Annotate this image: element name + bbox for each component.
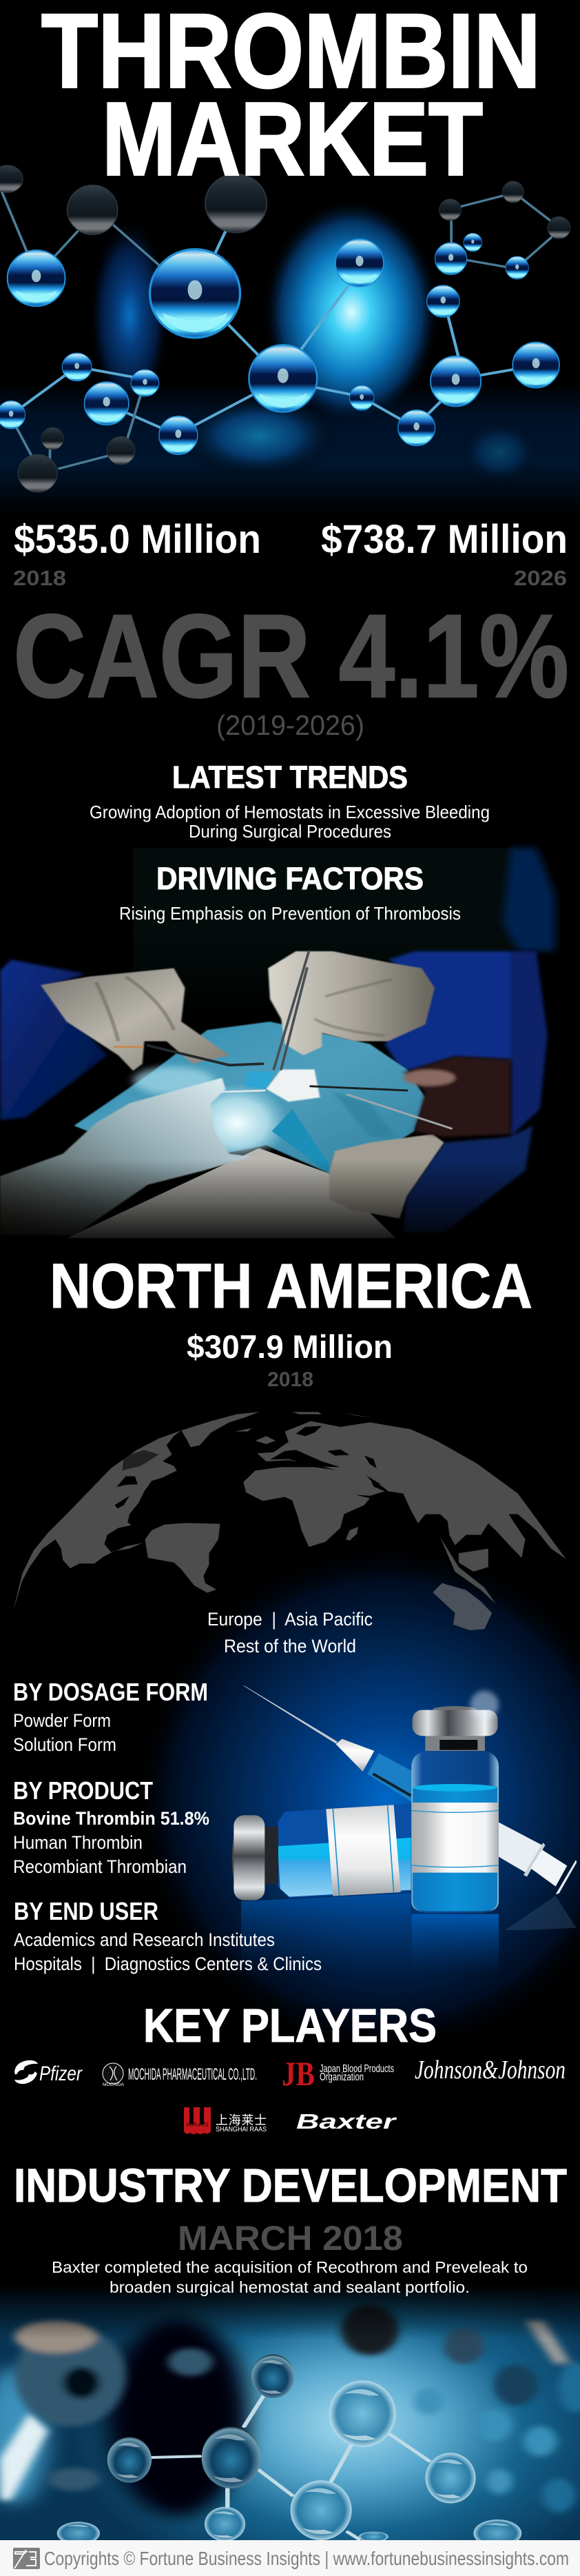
surgical tools	[114, 951, 451, 1128]
segment: by dosage form	[13, 1678, 208, 1755]
bottom molecule photo	[0, 2284, 580, 2547]
logo: Japan Blood Products Organization: JB	[282, 2054, 315, 2093]
glove: top centre	[268, 951, 435, 1055]
segment: by dosage form: Solution Form	[13, 1734, 116, 1755]
molecule bonds	[2, 192, 551, 469]
stat: 2018 market size: $535.0 Million	[14, 517, 261, 562]
segment: by dosage form: Powder Form	[13, 1710, 111, 1731]
photo background	[0, 2284, 580, 2540]
logo: Pfizer: Pfizer	[39, 2062, 83, 2085]
segment: by end user	[14, 1897, 322, 1974]
vial reflections	[241, 1894, 577, 1974]
world map	[13, 1412, 566, 1630]
driving factors text: Rising Emphasis on Prevention of Thrombosis	[119, 903, 461, 924]
syringe	[243, 1685, 577, 1894]
stat: 2026 market size: $738.7 Million	[321, 517, 568, 562]
stat: 2026 market size	[321, 517, 568, 590]
footer	[0, 2540, 580, 2576]
logo: Shanghai RAAS: 上海莱士	[216, 2113, 267, 2127]
logo: Pfizer	[14, 2060, 83, 2085]
regions list: Rest of the World	[224, 1636, 356, 1656]
operating table backdrop	[133, 848, 555, 1019]
logo: Shanghai RAAS: SHANGHAI RAAS	[216, 2126, 267, 2133]
logo: Mochida: MOCHIDA	[103, 2083, 124, 2087]
heading: north america: NORTH AMERICA	[50, 1251, 532, 1321]
blurred background molecules	[14, 2304, 580, 2513]
segment: by product: Human Thrombin	[13, 1832, 143, 1853]
icon: Fortune Business Insights logo	[13, 2548, 40, 2569]
body surface	[67, 1148, 396, 1238]
development description: broaden surgical hemostat and sealant portfolio.	[110, 2278, 470, 2296]
vial lying down	[232, 1804, 411, 1900]
segment: by end user: BY END USER	[14, 1897, 158, 1925]
hero molecule illustration	[0, 165, 580, 514]
stat: north america value: 2018	[267, 1368, 313, 1391]
right gown	[384, 951, 548, 1233]
logo: Japan Blood Products Organization: Japan Blood Products	[320, 2063, 394, 2075]
segment: by product: Recombiant Thrombian	[13, 1856, 187, 1877]
logo: Baxter: Baxter	[296, 2109, 397, 2133]
regions list	[207, 1609, 373, 1656]
stat: 2018 market size: 2018	[13, 566, 66, 590]
title: MARKET	[102, 80, 483, 197]
segment: by product	[13, 1776, 209, 1877]
stat: 2026 market size: 2026	[514, 566, 567, 590]
development description	[52, 2258, 528, 2296]
heading: latest trends: LATEST TRENDS	[172, 760, 408, 795]
upright vial	[411, 1691, 499, 1913]
segment: by dosage form: BY DOSAGE FORM	[13, 1678, 208, 1706]
left gown	[0, 960, 107, 1120]
stat: north america value	[187, 1328, 393, 1391]
segment: by product: Bovine Thrombin 51.8%	[13, 1808, 209, 1829]
title	[41, 0, 541, 197]
photo bottom fade	[0, 1159, 580, 1249]
stat: 2018 market size	[13, 517, 261, 590]
latest trends text: During Surgical Procedures	[189, 821, 391, 842]
blue drape	[74, 1022, 426, 1173]
surgery photo	[0, 848, 580, 1249]
photo top fade	[0, 2284, 580, 2339]
molecule spheres, bright	[0, 233, 559, 454]
text: MOCHIDA PHARMACEUTICAL CO.,LTD.	[128, 2065, 257, 2084]
segment: by end user: Hospitals | Diagnostics Centers & Clinics	[14, 1954, 322, 1974]
heading: key players: KEY PLAYERS	[143, 1999, 437, 2052]
glove: bottom right	[329, 1134, 444, 1219]
molecule spheres, dark	[0, 165, 570, 492]
molecule glow background	[0, 199, 580, 514]
latest trends text: Growing Adoption of Hemostats in Excessive Bleeding	[90, 802, 490, 822]
segment: by end user: Academics and Research Institutes	[14, 1929, 275, 1950]
logo: Mochida	[103, 2063, 257, 2087]
logo: Japan Blood Products Organization	[282, 2054, 394, 2093]
glove: bottom left	[0, 1078, 251, 1235]
development description: Baxter completed the acquisition of Recothrom and Preveleak to	[52, 2258, 528, 2276]
glove: dark right	[403, 1057, 510, 1137]
latest trends text	[90, 802, 490, 842]
gauze	[267, 1069, 320, 1102]
heading: driving factors: DRIVING FACTORS	[156, 861, 424, 896]
logo: Shanghai RAAS: RAAS	[186, 2122, 209, 2128]
segment: by product: BY PRODUCT	[13, 1776, 153, 1805]
date: march 2018: MARCH 2018	[178, 2219, 403, 2258]
bottom molecule spheres	[57, 2355, 521, 2547]
blue glow backdrop	[0, 1544, 580, 2054]
CAGR: (2019-2026)	[216, 709, 364, 741]
glove: top left	[41, 968, 229, 1071]
logo: Japan Blood Products Organization: Organization	[320, 2071, 364, 2083]
vials and syringe	[232, 1685, 577, 1974]
logo: Shanghai RAAS	[184, 2107, 267, 2134]
stat: north america value: $307.9 Million	[187, 1328, 393, 1365]
regions list: Europe | Asia Pacific	[207, 1609, 373, 1630]
bottom bonds	[152, 2394, 429, 2539]
